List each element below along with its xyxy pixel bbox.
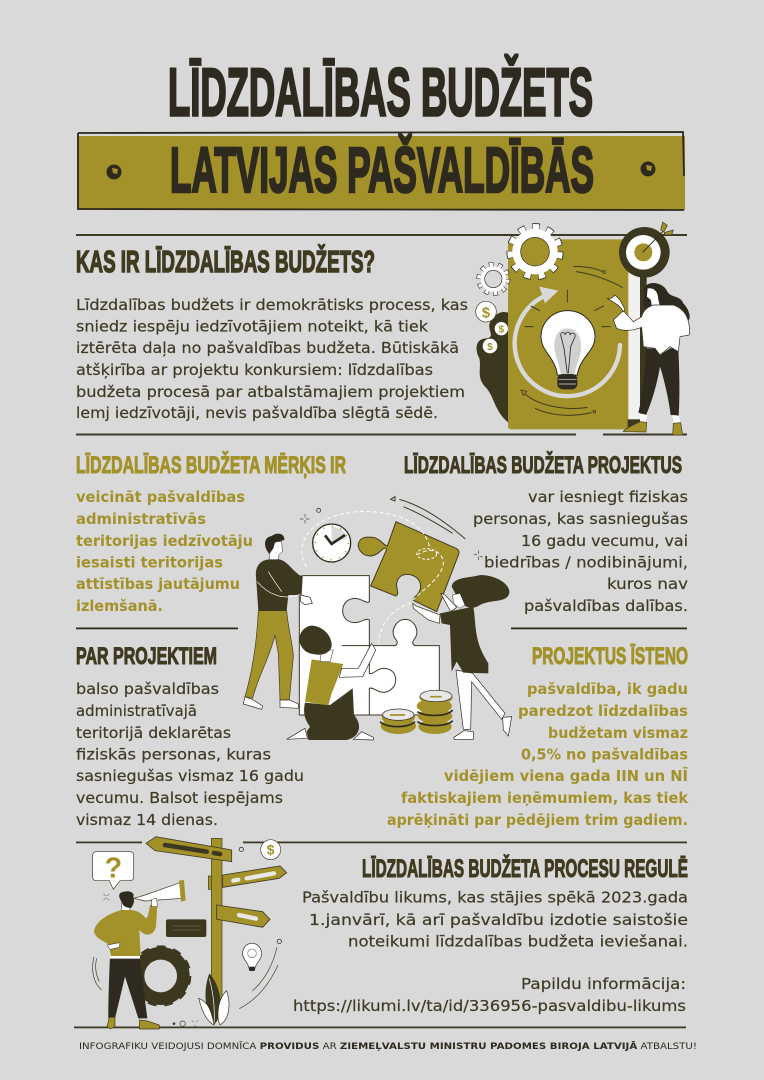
text block: goal: administratīvās	[76, 510, 206, 528]
text block: definition: lemj iedzīvotāji, nevis pašvaldība slēgtā sēdē.	[76, 404, 438, 422]
heading: about projects: PAR PROJEKTIEM	[76, 643, 217, 670]
light bulb	[541, 311, 595, 389]
text block: who may submit projects	[473, 488, 688, 615]
text block: regulation: noteikumi līdzdalības budžeta ieviešanai.	[348, 932, 688, 950]
text block: who may submit projects: kuros nav	[607, 575, 688, 593]
speech bubble with question mark: ?	[105, 853, 122, 885]
text block: voting	[76, 680, 304, 829]
man	[243, 534, 312, 709]
text block: implementation: vidējiem viena gada IIN un NĪ	[444, 765, 688, 785]
plants	[199, 973, 229, 1025]
text block: goal: izlemšanā.	[76, 597, 163, 615]
plant	[476, 312, 509, 423]
target with arrow	[619, 222, 673, 427]
gear small	[479, 265, 507, 293]
text block: definition: budžeta procesā par atbalstāmajiem projektiem	[76, 383, 465, 401]
banner: Latvijas pašvaldības	[77, 132, 685, 210]
text block: voting: teritorijā deklarētas	[76, 724, 231, 742]
coins: $	[482, 305, 490, 321]
text block: definition: atšķirība ar projektu konkursiem: līdzdalības	[76, 361, 433, 379]
coins: $	[499, 325, 505, 336]
dashed path	[302, 512, 443, 643]
text block: regulation: Pašvaldību likums, kas stājies spēkā 2023.gada	[302, 888, 688, 906]
text block: who may submit projects: 16 gadu vecumu, vai	[521, 532, 688, 550]
puzzle olive piece	[358, 522, 459, 612]
dark sign	[166, 919, 206, 937]
heading: goal: LĪDZDALĪBAS BUDŽETA MĒRĶIS IR	[76, 451, 346, 479]
panel	[508, 239, 630, 429]
text block: more information	[293, 975, 686, 1015]
coins: $	[487, 342, 493, 353]
text block: voting: fiziskās personas, kuras	[76, 746, 271, 764]
text block: voting: balso pašvaldības	[76, 680, 219, 698]
text block: goal: iesaisti teritorijas	[76, 554, 223, 572]
text block: definition: sniedz iespēju iedzīvotājiem noteikt, kā tiek	[76, 318, 428, 336]
text block: implementation	[387, 680, 689, 829]
illustration: idea bulb, gears, target and woman	[476, 222, 690, 435]
text block: goal: teritorijas iedzīvotāju	[76, 532, 253, 550]
speech bubble with question mark	[93, 852, 134, 889]
text block: implementation: budžetam vismaz	[548, 724, 688, 742]
coin stacks	[380, 690, 453, 734]
text block: who may submit projects: biedrības / nodibinājumi,	[484, 554, 688, 572]
text block: definition	[76, 296, 468, 422]
small bulb	[243, 943, 262, 971]
gear	[134, 949, 187, 1003]
text block: who may submit projects: var iesniegt fiziskas	[528, 488, 688, 506]
coin: $	[267, 842, 275, 858]
text block: voting: sasniegušas vismaz 16 gadu	[76, 767, 304, 785]
text block: who may submit projects: personas, kas sasniegušas	[473, 510, 688, 528]
puzzle white pieces	[299, 576, 439, 715]
text block: definition: Līdzdalības budžets ir demokrātisks process, kas	[76, 296, 468, 314]
woman	[607, 283, 690, 435]
text block: voting: vecumu. Balsot iespējams	[76, 789, 283, 807]
standing woman	[413, 575, 512, 739]
text block: voting: administratīvajā	[76, 702, 197, 720]
heading: what is participatory budget: KAS IR LĪDZDALĪBAS BUDŽETS?	[76, 243, 375, 279]
coins	[476, 301, 508, 353]
text block: implementation: faktiskajiem ieņēmumiem, kas tiek	[401, 789, 689, 807]
text block: implementation: pašvaldība, ik gadu	[527, 680, 688, 698]
text block: regulation	[302, 888, 688, 950]
text block: more information: Papildu informācija:	[521, 975, 686, 993]
text block: more information: https://likumi.lv/ta/id/336956-pasvaldibu-likums	[293, 997, 686, 1015]
text block: implementation: paredzot līdzdalības	[518, 702, 688, 720]
man with telescope	[93, 880, 186, 1029]
text block: implementation: 0,5% no pašvaldības	[521, 746, 688, 764]
text block: goal: attīstības jautājumu	[76, 575, 240, 593]
illustration: people assembling puzzle	[243, 497, 512, 740]
gear large	[511, 228, 559, 276]
text block: goal: veicināt pašvaldības	[76, 488, 245, 506]
illustration: man with telescope and signpost	[93, 837, 287, 1029]
text block: goal	[76, 488, 253, 615]
signpost	[146, 837, 287, 1002]
text block: voting: vismaz 14 dienas.	[76, 811, 218, 829]
coin	[261, 840, 281, 860]
text block: implementation: aprēķināti par pēdējiem trim gadiem.	[387, 811, 688, 829]
text block: definition: iztērēta daļa no pašvaldības budžeta. Būtiskākā	[76, 339, 459, 357]
clock	[313, 524, 351, 562]
footer credit: INFOGRAFIKU VEIDOJUSI DOMNĪCA PROVIDUS AR ZIEMEĻVALSTU MINISTRU PADOMES BIROJA LATVIJĀ ATBALSTU!	[79, 1041, 697, 1052]
text block: regulation: 1.janvārī, kā arī pašvaldību izdotie saistošie	[309, 911, 688, 929]
kneeling woman	[287, 626, 376, 740]
circular arrow	[515, 287, 620, 396]
text block: who may submit projects: pašvaldības dalības.	[524, 597, 688, 615]
